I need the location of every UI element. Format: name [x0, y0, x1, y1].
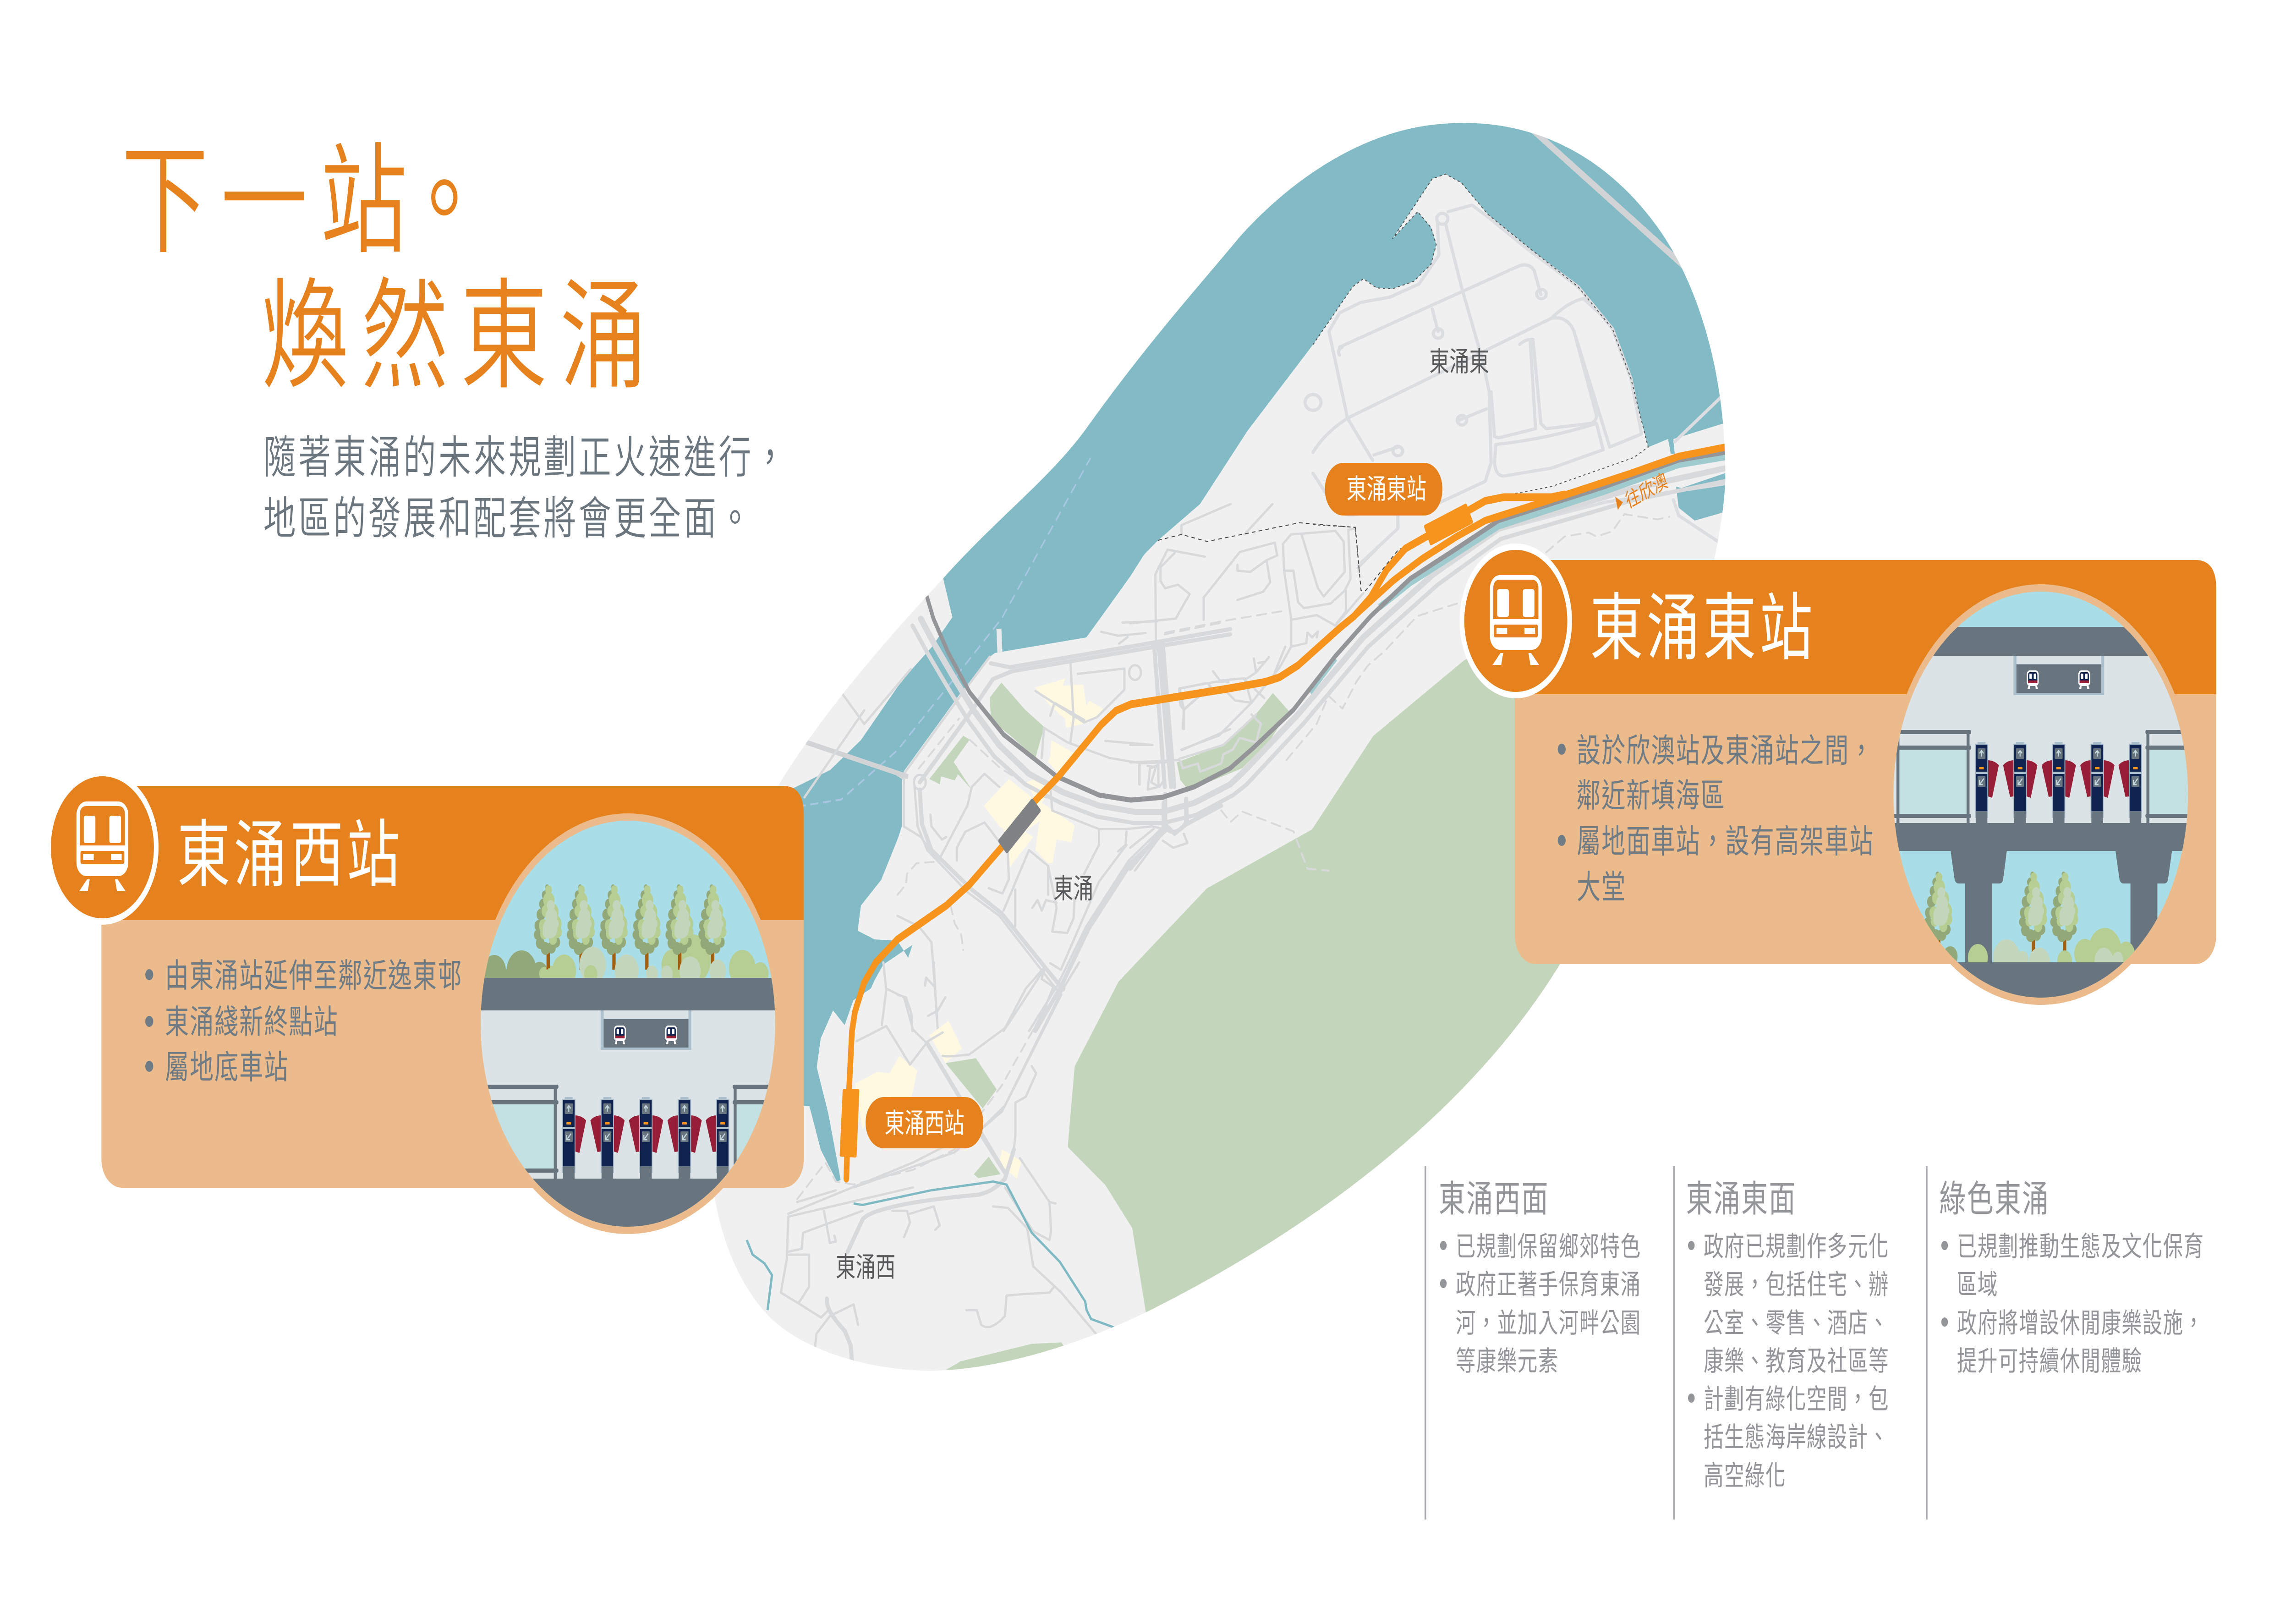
- bullet list: 由東涌站延伸至鄰近逸東邨: [165, 958, 462, 994]
- railway: existing line: [927, 452, 1725, 800]
- bullet list: [145, 958, 462, 1086]
- title: 煥然東涌: [262, 269, 659, 404]
- station: Tung Chung: [1000, 801, 1040, 851]
- column: Tung Chung East development: 括生態海岸線設計、: [1704, 1422, 1889, 1453]
- column: Tung Chung West development: 等康樂元素: [1456, 1346, 1559, 1377]
- railway: extension: [846, 494, 1565, 1179]
- bridge and peninsula road: [1532, 130, 1688, 270]
- column: Tung Chung West development: 河，並加入河畔公園: [1456, 1308, 1641, 1339]
- column: Tung Chung East development: 公室、零售、酒店、: [1704, 1308, 1889, 1339]
- bullet list: [1558, 733, 1874, 906]
- pill: Tung Chung West station: [866, 1097, 983, 1148]
- coast dotted line: central: [1158, 523, 1408, 591]
- green patches: [929, 682, 1044, 790]
- column: Tung Chung West development: 政府正著手保育東涌: [1456, 1270, 1641, 1300]
- green belt: [1068, 659, 1560, 1312]
- column: Green Tung Chung: 綠色東涌: [1939, 1179, 2050, 1219]
- station: Tung Chung East: [1425, 505, 1472, 543]
- streams: [854, 1181, 1115, 1328]
- bullet list: 鄰近新填海區: [1577, 778, 1726, 814]
- intro text: [263, 433, 789, 544]
- station: Tung Chung West: [841, 1091, 858, 1156]
- column: Tung Chung East development: 高空綠化: [1704, 1461, 1786, 1492]
- map label: Tung Chung West: 東涌西: [836, 1252, 895, 1283]
- column: Tung Chung East development: [1673, 1166, 1889, 1520]
- water: [793, 123, 1723, 1181]
- bullet list: 大堂: [1577, 869, 1626, 906]
- pill: Tung Chung East station: [1325, 463, 1442, 516]
- column: Tung Chung West development: 東涌西面: [1439, 1179, 1549, 1219]
- column: Green Tung Chung: 已規劃推動生態及文化保育: [1957, 1232, 2204, 1262]
- southern corridor roads: [1504, 397, 1724, 542]
- bullet list: 屬地底車站: [165, 1049, 289, 1086]
- built-up patches: [984, 679, 1104, 867]
- central roads: [898, 621, 1230, 1031]
- intro text: 隨著東涌的未來規劃正火速進行，: [263, 433, 789, 483]
- column: Tung Chung East development: 計劃有綠化空間，包: [1704, 1384, 1889, 1415]
- station scene: [475, 813, 781, 1234]
- icon: train: [46, 770, 159, 925]
- map label: Tung Chung East: 東涌東: [1430, 347, 1489, 378]
- column: Tung Chung East development: 發展，包括住宅、辦: [1704, 1270, 1889, 1300]
- station scene: [1888, 584, 2193, 1008]
- panel: Tung Chung West station: [46, 770, 804, 1234]
- column: Tung Chung West development: [1425, 1166, 1641, 1520]
- column: Green Tung Chung: [1926, 1166, 2204, 1520]
- railway: main line: [1354, 447, 1725, 616]
- bullet list: 東涌綫新終點站: [165, 1004, 339, 1041]
- south-west roads: [781, 962, 1097, 1363]
- bullet list: 設於欣澳站及東涌站之間，: [1577, 733, 1874, 769]
- pill: Tung Chung West station: 東涌西站: [885, 1108, 965, 1139]
- icon: train: [1460, 543, 1572, 698]
- column: Tung Chung West development: 已規劃保留鄉郊特色: [1456, 1232, 1641, 1262]
- intro text: 地區的發展和配套將會更全面。: [263, 494, 754, 544]
- panel: Tung Chung East station: [1460, 543, 2216, 1008]
- map: [715, 123, 1726, 1371]
- green and built-up patches: south-west: [946, 1058, 1064, 1372]
- expressway: [921, 468, 1725, 812]
- column: Green Tung Chung: 區域: [1957, 1270, 1998, 1300]
- column: Tung Chung East development: 康樂、教育及社區等: [1704, 1346, 1889, 1377]
- north-central roads: [1130, 504, 1461, 871]
- title: [121, 134, 659, 404]
- column: Tung Chung East development: 政府已規劃作多元化: [1704, 1232, 1889, 1262]
- panel heading: 東涌東站: [1590, 587, 1816, 669]
- map label: Tung Chung: 東涌: [1053, 874, 1093, 905]
- column: Tung Chung East development: 東涌東面: [1686, 1179, 1796, 1219]
- bullet list: 屬地面車站，設有高架車站: [1577, 823, 1874, 860]
- pier: [999, 629, 1000, 653]
- column: Green Tung Chung: 政府將增設休閒康樂設施，: [1957, 1308, 2204, 1339]
- channel dashed line: [803, 458, 1091, 807]
- panel heading: 東涌西站: [177, 814, 403, 896]
- east district roads: [1305, 205, 1642, 565]
- green park: [1177, 693, 1289, 790]
- coast dotted line: [1313, 174, 1648, 573]
- title: 下一站。: [121, 134, 500, 269]
- column: Green Tung Chung: 提升可持續休閒體驗: [1957, 1346, 2143, 1377]
- pill: Tung Chung East station: 東涌東站: [1347, 474, 1426, 505]
- direction label: 往欣澳: [1623, 469, 1670, 513]
- railway: teal alignment: [1310, 457, 1725, 692]
- water: east inlet: [1676, 472, 1728, 521]
